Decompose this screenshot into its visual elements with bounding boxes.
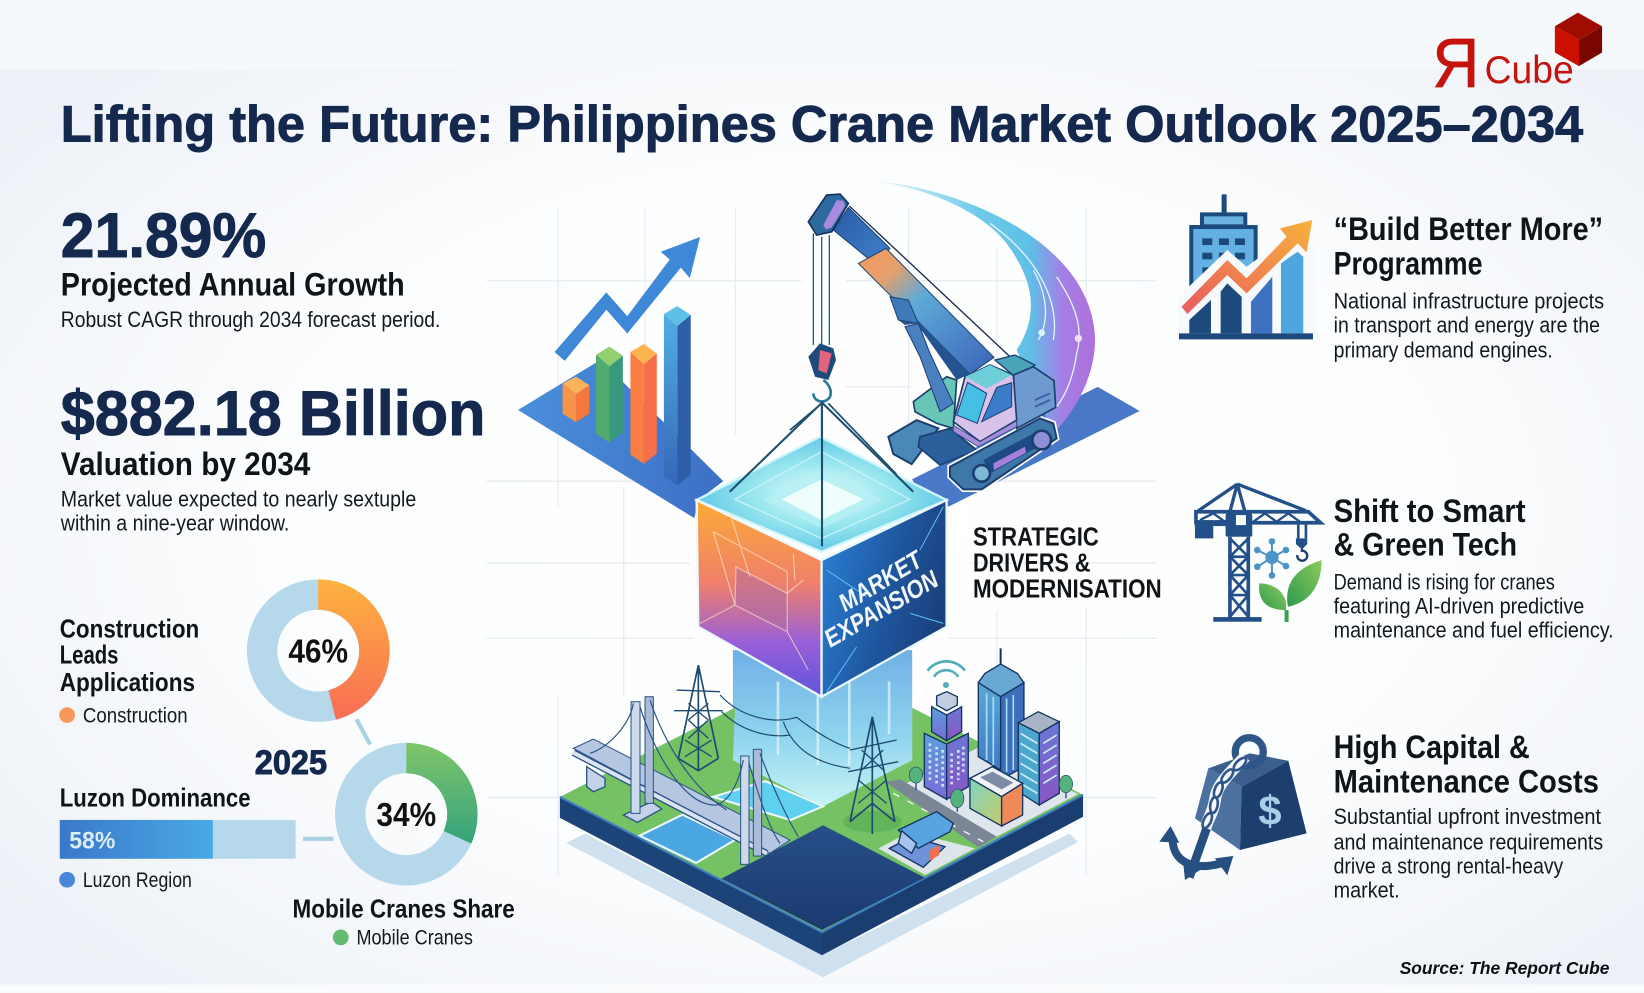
warehouse: [889, 812, 953, 867]
wifi icon: [928, 661, 965, 688]
bar: Luzon dominance: [59, 782, 296, 892]
driver text: high capital costs: Substantial upfront investment: [1334, 804, 1601, 829]
light column: [733, 650, 912, 806]
crane rear body: [913, 377, 957, 428]
driver text: build better more: “Build Better More”: [1334, 211, 1603, 247]
panel: smart and green tech: [1195, 484, 1614, 643]
bar: Luzon dominance: 58%: [69, 827, 115, 854]
market expansion cube: [697, 437, 947, 697]
donut label: construction: Leads: [60, 640, 118, 670]
logo: RCube: [1432, 13, 1602, 102]
crane hoist ropes: [813, 233, 829, 345]
driver text: smart and green tech: Shift to Smart: [1334, 493, 1526, 529]
transmission tower left: [674, 665, 723, 771]
logo: RCube: Cube: [1485, 49, 1574, 92]
connector lines: [303, 719, 370, 839]
year label: 2025: [255, 744, 327, 782]
floor: right blue diamond: [912, 387, 1140, 506]
icon: weight with chain and anchor: $: [1258, 787, 1282, 834]
driver text: smart and green tech: maintenance and fuel efficiency.: [1334, 618, 1614, 643]
navy square: [721, 825, 925, 930]
stat: valuation: within a nine-year window.: [60, 511, 289, 536]
donut label: mobile cranes: Mobile Cranes: [356, 927, 473, 950]
donut: mobile cranes 34%: 34%: [376, 797, 436, 834]
growth arrow: [555, 237, 700, 361]
donut label: construction: Applications: [60, 667, 195, 697]
stat: valuation: [60, 379, 485, 536]
icon: building with rising arrow: [1178, 194, 1315, 339]
tall tower: [978, 648, 1024, 780]
donut label: construction: [59, 614, 199, 727]
donut: construction 46%: [262, 579, 390, 720]
transmission tower right: [843, 717, 902, 834]
stepped tower: [924, 692, 968, 799]
driver text: smart and green tech: Demand is rising for cranes: [1334, 569, 1555, 594]
heading: strategic drivers: DRIVERS &: [973, 547, 1090, 577]
crane hook: [808, 343, 836, 402]
panel: key statistics: [60, 201, 485, 536]
heading: strategic drivers: MODERNISATION: [973, 574, 1162, 604]
stat: growth: Robust CAGR through 2034 forecast period.: [61, 307, 440, 332]
slings over cube: [730, 403, 913, 546]
driver text: build better more: National infrastructure projects: [1334, 288, 1604, 313]
chart scene with grid: [487, 207, 1156, 877]
motion swoosh: [878, 182, 1095, 433]
striped tower: [1018, 712, 1059, 805]
trees: [909, 767, 1073, 812]
stat: valuation: Valuation by 2034: [61, 446, 310, 482]
driver text: build better more: Programme: [1334, 246, 1483, 282]
water under column: [713, 781, 823, 820]
crane tracks: [888, 418, 1057, 489]
donut label: mobile cranes: Mobile Cranes Share: [293, 893, 515, 923]
driver text: smart and green tech: & Green Tech: [1334, 527, 1517, 563]
donut label: construction: Construction: [83, 704, 188, 727]
driver text: build better more: in transport and energy are the: [1334, 312, 1600, 337]
crane with swoosh: [790, 182, 1095, 500]
road and plazas: [878, 747, 1078, 875]
driver text: smart and green tech: [1334, 493, 1614, 643]
driver text: high capital costs: drive a strong rental-heavy: [1334, 853, 1563, 878]
donut label: construction: Construction: [60, 614, 199, 644]
power lines: [720, 695, 850, 768]
stat: growth: [61, 201, 440, 332]
panel: build better more: [1178, 194, 1604, 363]
bar: Luzon dominance: Luzon Dominance: [60, 782, 251, 812]
icon: tower crane with network and leaf: [1195, 484, 1322, 622]
panel: high capital costs: [1159, 729, 1603, 903]
bridge and transmission tower: [573, 665, 850, 864]
crane hydraulic arm: [905, 323, 953, 412]
logo: RCube: Я: [1432, 24, 1479, 102]
icon: weight with chain and anchor: [1159, 738, 1307, 880]
driver text: high capital costs: [1334, 729, 1603, 903]
stat: valuation: $882.18 Billion: [61, 379, 485, 449]
water left: [640, 815, 735, 863]
cube label: MARKET: [834, 545, 929, 617]
stat: growth: Projected Annual Growth: [61, 267, 405, 303]
crane slings upper: [790, 403, 913, 500]
bar chart icon: [563, 306, 691, 485]
donut: mobile cranes 34%: [350, 743, 478, 870]
colourful low building: [970, 767, 1023, 826]
bridge towers and cables: [590, 697, 798, 864]
driver text: high capital costs: and maintenance requirements: [1334, 829, 1603, 854]
source note: Source: The Report Cube: [1400, 958, 1609, 978]
driver text: build better more: primary demand engines.: [1334, 338, 1553, 363]
driver text: build better more: [1334, 211, 1604, 363]
stat: growth: 21.89%: [61, 201, 266, 271]
crane cab: [953, 365, 1017, 447]
platform: [560, 708, 1083, 955]
driver text: high capital costs: High Capital &: [1334, 729, 1530, 765]
driver text: high capital costs: market.: [1334, 878, 1400, 903]
central illustration: crane lifting market expansion cube: [487, 182, 1156, 977]
city and transmission tower: [843, 648, 1078, 875]
heading: strategic drivers: [973, 521, 1162, 604]
donut label: mobile cranes: [293, 893, 515, 950]
crane engine housing: [995, 355, 1056, 428]
donut: construction 46%: 46%: [288, 634, 348, 671]
driver text: smart and green tech: featuring AI-driven predictive: [1334, 593, 1584, 618]
bridge deck: [573, 739, 790, 853]
bar: Luzon dominance: Luzon Region: [83, 869, 192, 892]
heading: strategic drivers: STRATEGIC: [973, 521, 1099, 551]
cube label: EXPANSION: [819, 565, 944, 653]
floor: left blue diamond: [518, 360, 723, 518]
title: Lifting the Future: Philippines Crane Market Outlook 2025–2034: [61, 95, 1584, 153]
crane boom: [808, 194, 1010, 380]
stat: valuation: Market value expected to nearly sextuple: [61, 486, 416, 511]
platform shadow: [566, 834, 1078, 977]
driver text: high capital costs: Maintenance Costs: [1334, 764, 1599, 800]
panel: 2025 market shares: [59, 579, 515, 950]
